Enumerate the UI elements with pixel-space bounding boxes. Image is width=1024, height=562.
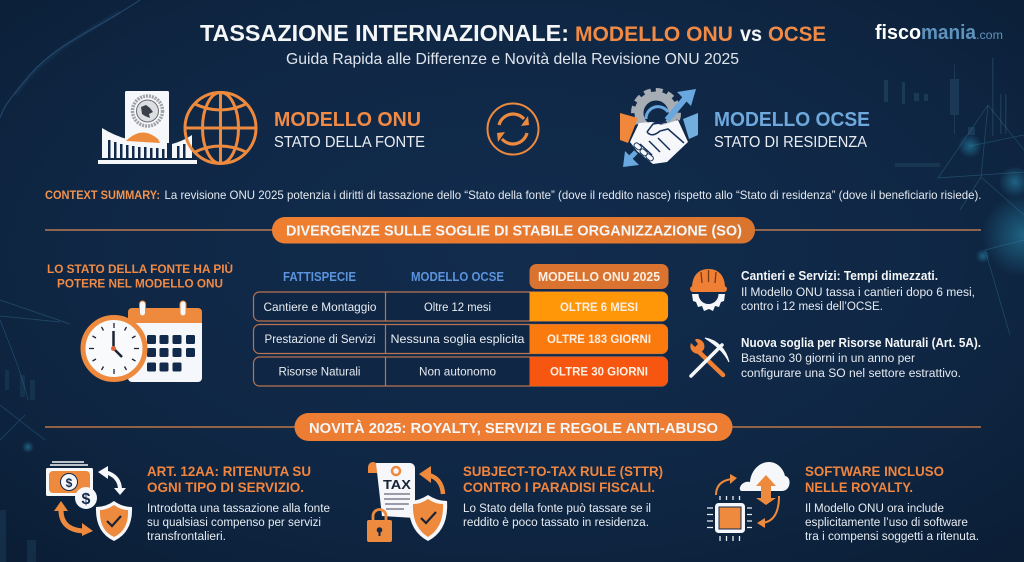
logo: fiscomania.com: mania [921,22,977,44]
text block: software incluso: SOFTWARE INCLUSO [805,463,944,479]
text block: risorse naturali: Nuova soglia per Risorse Naturali (Art. 5A). [741,336,981,350]
row: risorse naturali: Non autonomo [419,364,496,378]
title: OCSE [768,22,826,46]
icon: chip and cloud [707,462,790,541]
callout: stato della fonte: LO STATO DELLA FONTE HA PIÙ [47,261,233,276]
icon: hard hat and gear [690,269,727,311]
text block: cantieri e servizi [741,269,975,313]
section header: novità 2025: NOVITÀ 2025: ROYALTY, SERVIZI E REGOLE ANTI-ABUSO [309,420,718,437]
text block: software incluso: esplicitamente l’uso di software [805,515,968,529]
icon: money, arrows and shield: $ [66,476,73,490]
heading: modello ONU: MODELLO ONU [274,109,421,131]
row: cantiere e montaggio: Cantiere e Montaggio [264,300,377,314]
text block: risorse naturali: Bastano 30 giorni in un anno per [741,351,915,365]
row: risorse naturali: Risorse Naturali [278,364,360,378]
text block: art. 12AA: su qualsiasi compenso per servizi [147,515,321,529]
text block: cantieri e servizi: contro i 12 mesi dell’OCSE. [741,299,883,313]
title: MODELLO ONU [575,22,733,46]
text block: subject-to-tax rule [463,463,663,529]
title: TASSAZIONE INTERNAZIONALE: [200,20,569,46]
text block: software incluso [805,463,979,543]
icon: OECD handshake and gear [620,89,698,167]
text block: subject-to-tax rule: SUBJECT-TO-TAX RULE (STTR) [463,463,663,479]
comparison table [254,264,668,386]
heading: modello OCSE: STATO DI RESIDENZA [714,134,868,151]
section header: divergenze: DIVERGENZE SULLE SOGLIE DI STABILE ORGANIZZAZIONE (SO) [286,224,742,240]
text block: risorse naturali: configurare una SO nel settore estrattivo. [741,366,961,380]
row: cantiere e montaggio [254,292,668,321]
icon: money, arrows and shield [46,462,132,541]
icon: UN building and globe [98,91,256,164]
row: prestazione di servizi [254,324,668,354]
icon: exchange circle [488,104,538,154]
row: risorse naturali [254,357,668,386]
text block: art. 12AA: OGNI TIPO DI SERVIZIO. [147,479,304,495]
callout: stato della fonte [47,261,233,290]
row: prestazione di servizi: Prestazione di Servizi [264,332,376,346]
table header: FATTISPECIE [283,270,356,284]
text block: art. 12AA [147,463,330,543]
row: cantiere e montaggio: Oltre 12 mesi [424,300,491,314]
text block: art. 12AA: transfrontalieri. [147,529,226,543]
text block: cantieri e servizi: Cantieri e Servizi: Tempi dimezzati. [741,269,938,283]
heading: modello OCSE: MODELLO OCSE [714,109,870,131]
text block: subject-to-tax rule: reddito è poco tassato in residenza. [463,515,649,529]
heading: modello ONU: STATO DELLA FONTE [274,134,425,151]
logo: fiscomania.com [875,22,1003,44]
section header: novità 2025 [45,413,981,441]
icon: money, arrows and shield: $ [82,491,91,508]
context summary: La revisione ONU 2025 potenzia i diritti di tassazione dello “Stato della fonte” (dove il reddito nasce) rispetto allo “Stato di residenza” (dove il beneficiario risiede). [164,188,982,202]
row: risorse naturali: OLTRE 30 GIORNI [550,364,648,378]
text block: art. 12AA: Introdotta una tassazione alla fonte [147,501,330,515]
table header: MODELLO OCSE [411,270,504,284]
icon: clock and calendar [83,301,202,382]
callout: stato della fonte: POTERE NEL MODELLO ONU [57,276,223,290]
section header: divergenze [45,217,981,244]
text block: software incluso: NELLE ROYALTY. [805,479,913,495]
icon: wrench and pickaxe [690,338,729,376]
subtitle: Guida Rapida alle Differenze e Novità della Revisione ONU 2025 [286,51,739,68]
row: cantiere e montaggio: OLTRE 6 MESI [560,300,638,314]
text block: art. 12AA: ART. 12AA: RITENUTA SU [147,463,311,479]
icon: tax document, lock and shield: TAX [383,478,412,492]
table header [283,264,668,289]
text block: subject-to-tax rule: CONTRO I PARADISI FISCALI. [463,479,655,495]
text block: subject-to-tax rule: Lo Stato della fonte può tassare se il [463,501,651,515]
heading: modello OCSE [714,109,870,151]
row: prestazione di servizi: Nessuna soglia esplicita [390,332,525,346]
text block: software incluso: tra i compensi soggetti a ritenuta. [805,529,979,543]
heading: modello ONU [274,109,425,151]
title: vs [740,22,762,46]
context summary: CONTEXT SUMMARY: [45,188,160,202]
text block: cantieri e servizi: Il Modello ONU tassa i cantieri dopo 6 mesi, [741,285,975,299]
row: prestazione di servizi: OLTRE 183 GIORNI [547,332,651,346]
title [200,20,826,46]
text block: risorse naturali [741,336,981,380]
logo: fiscomania.com: fisco [875,22,921,44]
logo: fiscomania.com: .com [976,28,1003,42]
text block: software incluso: Il Modello ONU ora include [805,501,944,515]
icon: tax document, lock and shield [367,462,447,542]
table header: MODELLO ONU 2025 [538,270,660,284]
